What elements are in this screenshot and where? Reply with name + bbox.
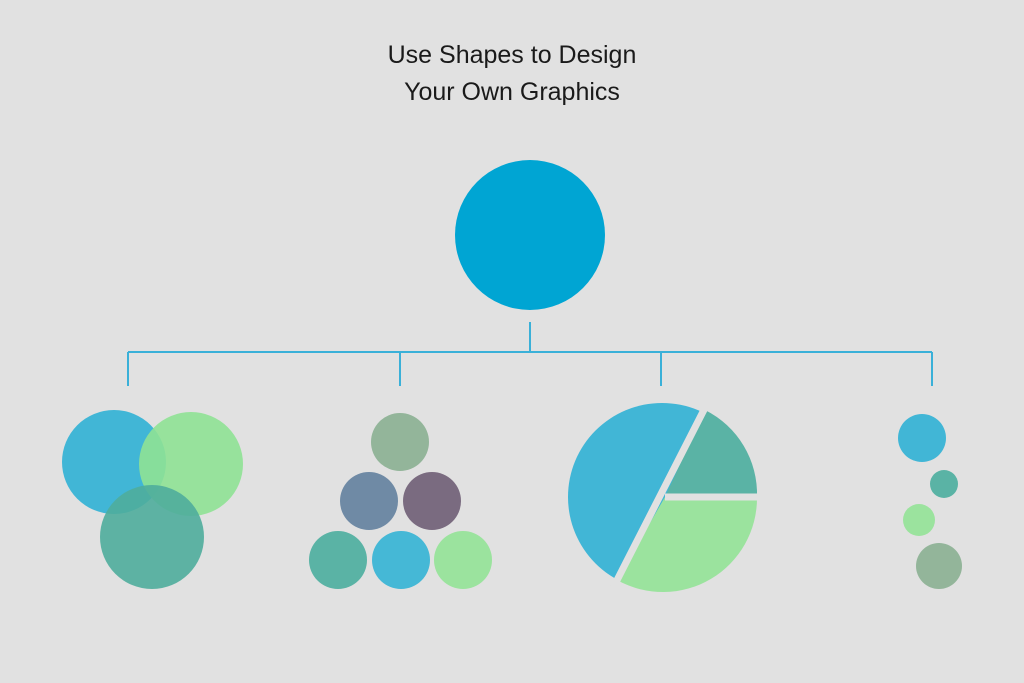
venn diagram — [62, 410, 243, 589]
bubble column — [898, 414, 962, 589]
title: Use Shapes to Design — [388, 41, 636, 69]
top circle — [455, 160, 605, 310]
circle pyramid — [309, 413, 492, 589]
title: Your Own Graphics — [404, 78, 620, 106]
connector tree — [128, 322, 932, 386]
title — [388, 41, 636, 106]
pie chart — [568, 398, 770, 592]
